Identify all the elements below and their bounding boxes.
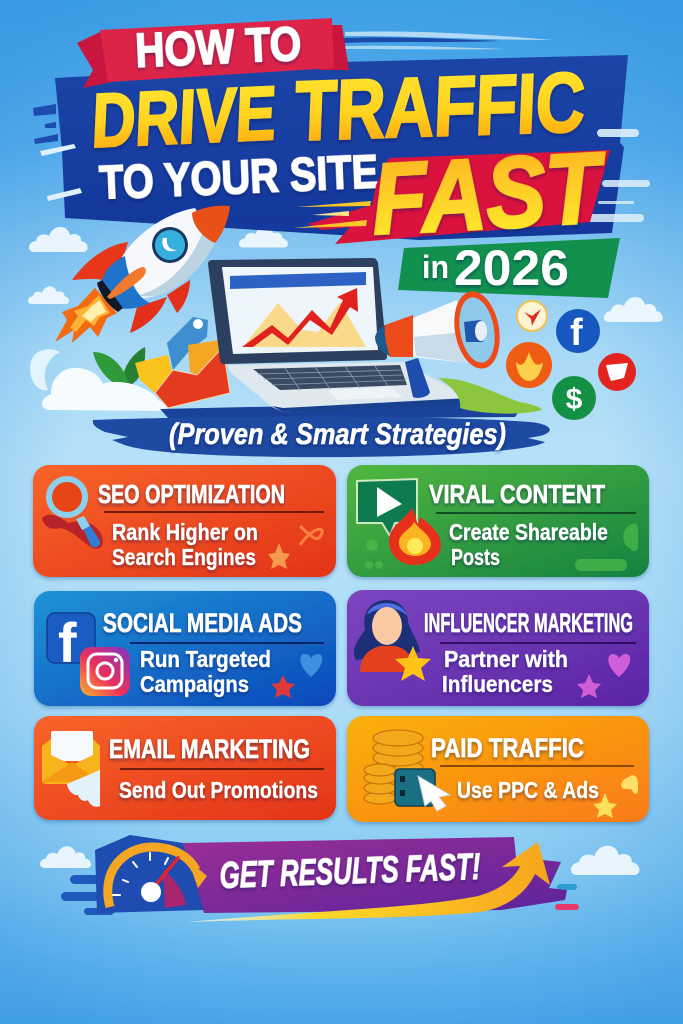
heading: PAID TRAFFIC [431,733,584,763]
icon: speedometer [108,847,207,908]
icon: flame [389,508,441,565]
divider [440,642,636,644]
text: Search Engines [112,544,256,570]
rising red arrow [242,288,358,347]
hull [97,206,230,312]
icon: magnifier [42,479,103,549]
speed blobs [61,875,579,915]
heading: SOCIAL MEDIA ADS [103,608,302,638]
heading: fast: FAST [369,132,610,256]
text [140,646,271,697]
window [152,227,188,263]
icon: red chat badge [598,353,636,391]
panel: paid traffic [347,716,649,822]
text [449,519,608,570]
illustration: megaphone [375,288,505,398]
panel: social media ads [34,591,336,706]
panel: email marketing [34,716,336,820]
icon: dollar: $ [566,383,583,416]
icon: influencer avatar [354,600,431,681]
divider [120,768,324,770]
speed streaks [293,201,371,228]
heading: how to: HOW TO [134,18,302,78]
heading: drive traffic: TRAFFIC [293,55,587,158]
divider [436,512,636,514]
icon: envelope with wing [42,731,100,807]
purple banner [183,837,567,913]
faint decorations [577,654,630,698]
clouds [28,227,663,875]
icon: small badge [517,301,547,331]
call to action banner [61,835,579,922]
rising arrow [187,842,550,922]
icon: facebook: f [570,312,583,354]
heading: VIRAL CONTENT [429,479,605,509]
fins [72,242,190,333]
divider [104,511,324,513]
heading: SEO OPTIMIZATION [98,479,285,509]
green year banner: in [422,249,449,285]
navy banner [55,55,628,240]
faint decorations [593,775,638,818]
text: Create Shareable [449,519,608,545]
keyboard [253,365,407,390]
flame [55,288,117,343]
speed lines top [343,31,552,49]
side dashes [33,104,650,222]
side fin [107,267,146,299]
text: Use PPC & Ads [457,777,599,803]
cta text: GET RESULTS FAST! [219,846,481,896]
title block [33,18,650,298]
heading: drive traffic: DRIVE [90,71,278,164]
text: Partner with [444,646,568,672]
icon: video play [357,479,417,536]
illustration: cloud and leaves [30,347,168,411]
text: Influencers [442,671,553,697]
subtitle banner [93,416,550,457]
panel: influencer marketing [347,590,649,706]
text: Send Out Promotions [119,777,318,803]
social icons cluster [506,301,636,420]
illustration: green leaf right [438,378,542,414]
heading: drive traffic [90,55,587,164]
faint decorations [271,654,322,698]
icon: facebook square: f [58,611,77,674]
gauge block [95,835,204,913]
red burst behind fast [308,150,610,244]
text [442,646,568,697]
illustration: laptop [160,258,520,420]
illustration: envelope and tag [135,317,230,408]
panel: viral content [347,465,649,577]
text: Run Targeted [140,646,271,672]
icon: orange flame badge [506,342,552,388]
green year banner: 2026 [454,240,569,296]
illustration: rocket [55,206,230,343]
divider [440,765,634,767]
heading: to your site: TO YOUR SITE [98,144,379,209]
heading: EMAIL MARKETING [109,734,310,764]
divider [130,642,324,644]
text [112,519,258,570]
red ribbon [77,18,349,88]
faint decorations [365,524,638,571]
text: Posts [451,544,500,570]
icon: coins and cursor [364,730,450,811]
faint decorations [268,526,322,569]
green year banner [398,238,620,298]
subtitle banner: (Proven & Smart Strategies) [169,418,506,451]
icon: instagram [80,647,130,696]
panel: seo optimization [33,465,336,577]
text: Campaigns [140,671,249,697]
text: Rank Higher on [112,519,258,545]
icon: facebook square [47,611,95,674]
